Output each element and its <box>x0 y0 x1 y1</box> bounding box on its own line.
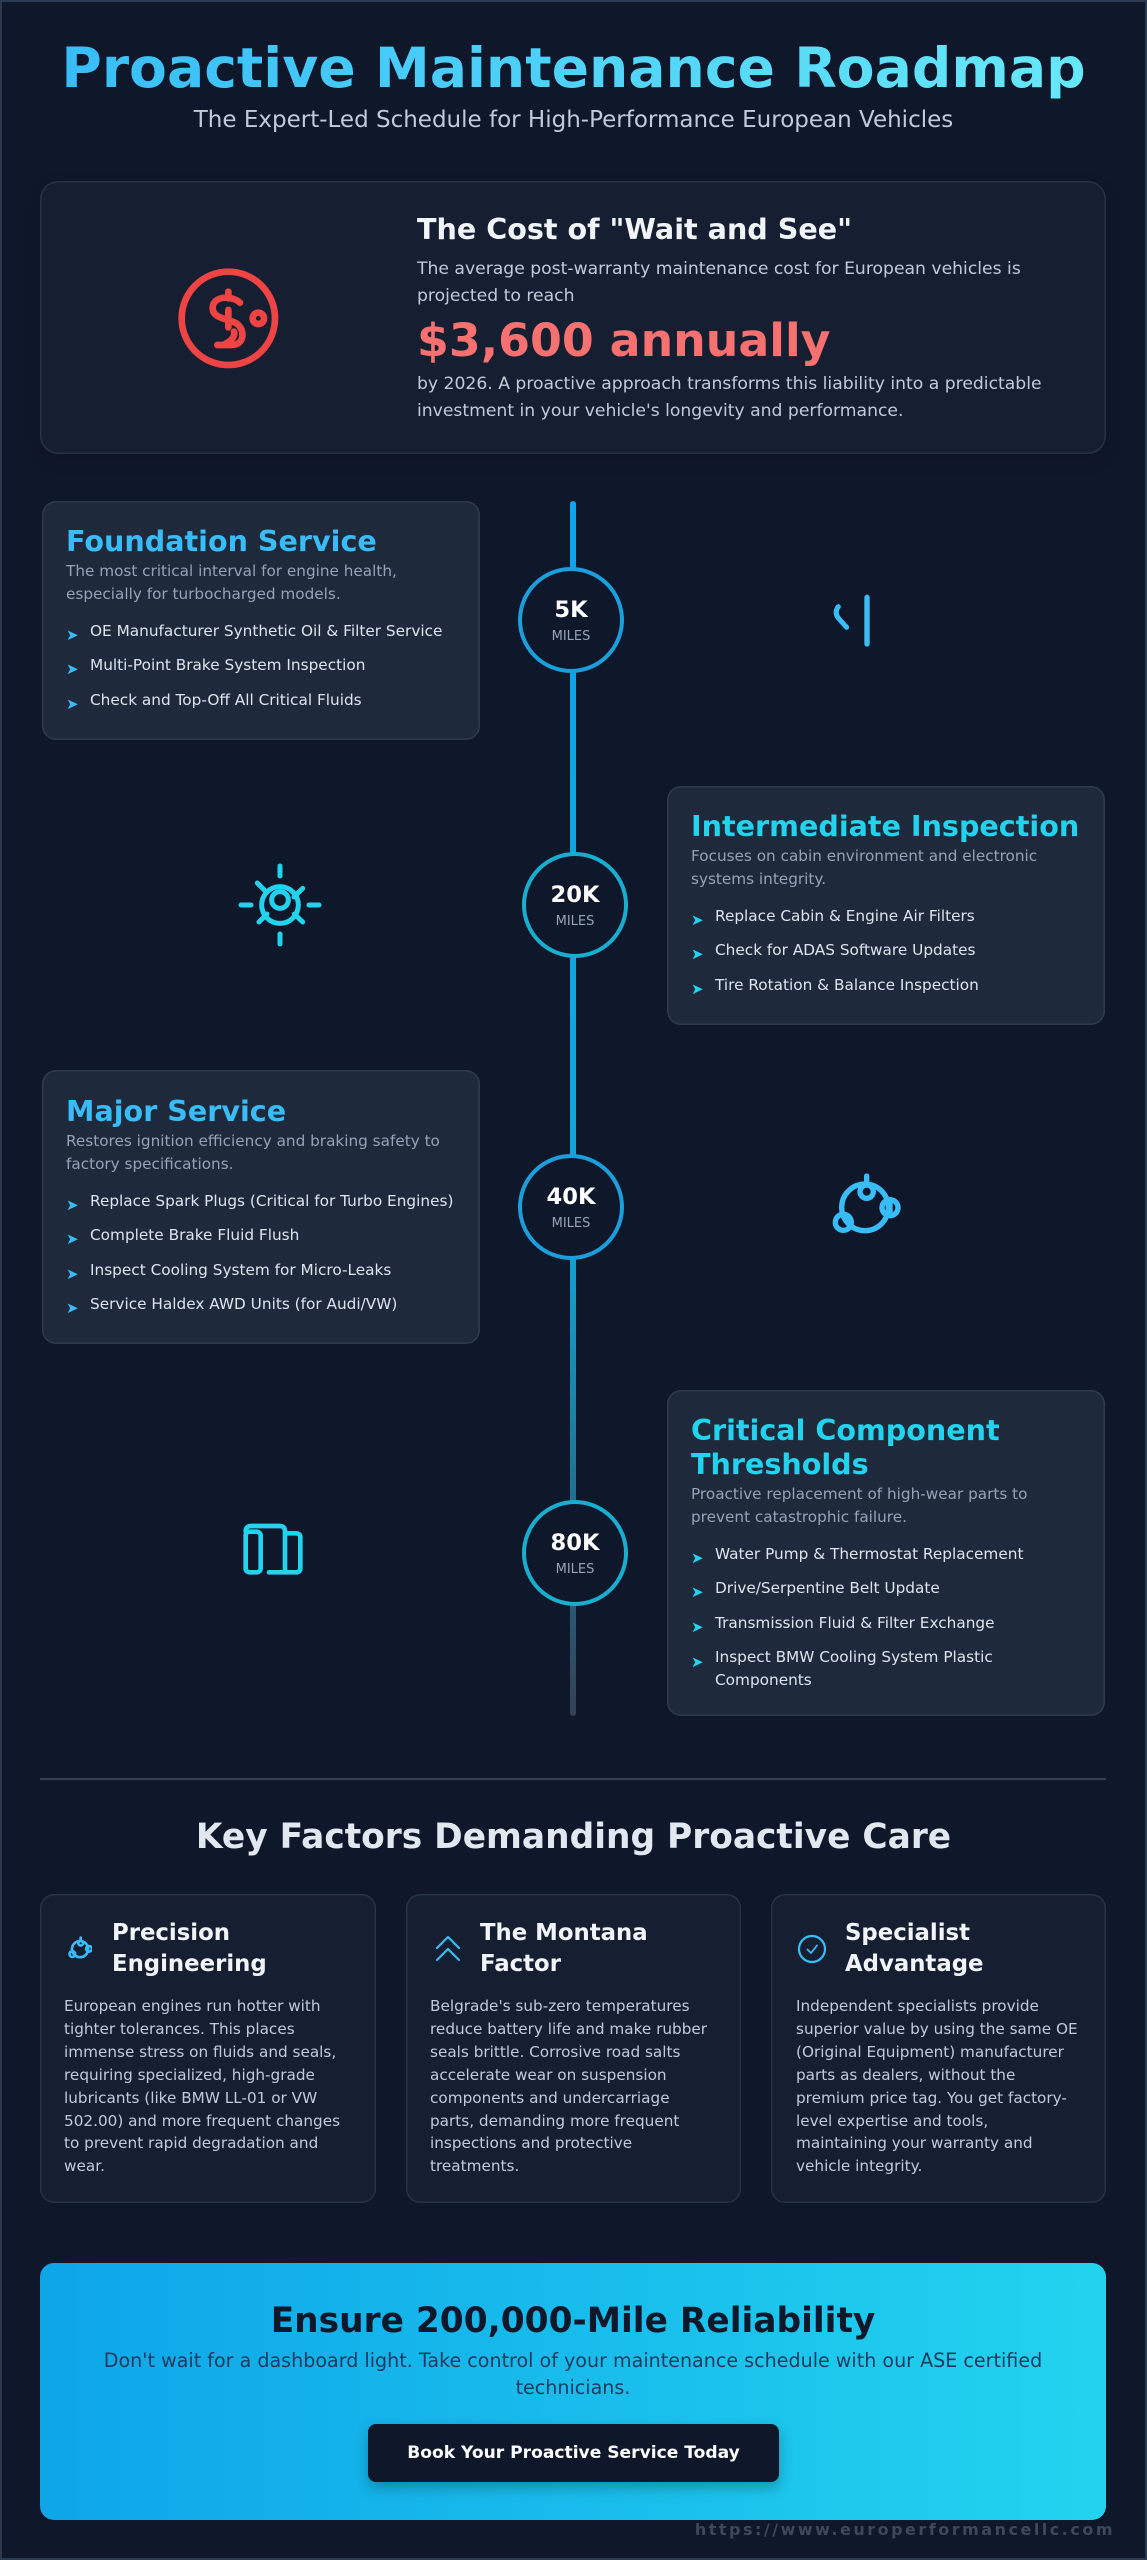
heading: key factors: Key Factors Demanding Proactive Care <box>196 1817 951 1857</box>
list item: Inspect Cooling System for Micro-Leaks <box>90 1261 391 1279</box>
body text: parts as dealers, without the <box>796 2066 1015 2084</box>
body text: superior value by using the same OE <box>796 2020 1078 2038</box>
text: outro <box>417 374 1042 421</box>
body text: immense stress on fluids and seals, <box>64 2043 336 2061</box>
divider <box>40 1778 1106 1780</box>
heading <box>112 1920 267 1977</box>
list item: ➤ <box>66 660 79 678</box>
list item: Complete Brake Fluid Flush <box>90 1226 299 1244</box>
milestone: 80K: 80K <box>551 1530 599 1556</box>
list item: Multi-Point Brake System Inspection <box>90 656 365 674</box>
panel: intermediate inspection <box>667 786 1105 1025</box>
list item: ➤ <box>691 980 704 998</box>
milestone: 80K <box>522 1500 628 1606</box>
body text: lubricants (like BMW LL-01 or VW <box>64 2089 317 2107</box>
heading <box>691 1413 1000 1481</box>
list item: Tire Rotation & Balance Inspection <box>715 976 979 994</box>
heading: Intermediate Inspection <box>691 809 1079 843</box>
list item: ➤ <box>66 1230 79 1248</box>
description <box>691 1484 1027 1526</box>
body text: inspections and protective <box>430 2134 632 2152</box>
body text: premium price tag. You get factory- <box>796 2089 1067 2107</box>
body text: reduce battery life and make rubber <box>430 2020 707 2038</box>
list item: Service Haldex AWD Units (for Audi/VW) <box>90 1295 397 1313</box>
body text: (Original Equipment) manufacturer <box>796 2043 1064 2061</box>
icon: parts blocks <box>243 1524 303 1575</box>
list item: ➤ <box>66 1264 79 1282</box>
milestone: 20K: MILES <box>556 914 594 929</box>
description: Restores ignition efficiency and braking safety to <box>66 1132 440 1150</box>
text: intro: The average post-warranty maintenance cost for European vehicles is <box>417 259 1021 279</box>
website url: https://www.europerformancellc.com <box>695 2520 1115 2539</box>
list item: ➤ <box>691 1652 704 1670</box>
panel: foundation service <box>42 501 480 740</box>
milestone: 40K: MILES <box>552 1216 590 1231</box>
heading <box>845 1920 984 1977</box>
body text: accelerate wear on suspension <box>430 2066 667 2084</box>
body text: requiring specialized, high-grade <box>64 2066 315 2084</box>
list item: Check for ADAS Software Updates <box>715 941 976 959</box>
milestone: 80K: MILES <box>556 1562 594 1577</box>
title: Proactive Maintenance Roadmap <box>61 37 1086 101</box>
list item: Inspect BMW Cooling System Plastic <box>715 1648 993 1666</box>
description: prevent catastrophic failure. <box>691 1508 907 1526</box>
heading: Critical Component <box>691 1413 1000 1447</box>
panel: cost of wait and see <box>40 181 1106 454</box>
body text: tighter tolerances. This places <box>64 2020 295 2038</box>
description: factory specifications. <box>66 1154 234 1172</box>
list item: ➤ <box>691 1582 704 1600</box>
body text: level expertise and tools, <box>796 2112 988 2130</box>
list item: Transmission Fluid & Filter Exchange <box>715 1614 995 1632</box>
heading: The Montana <box>480 1920 648 1946</box>
list item: ➤ <box>66 626 79 644</box>
list item: ➤ <box>691 944 704 962</box>
list item: Components <box>715 1671 812 1689</box>
body text: parts, demanding more frequent <box>430 2112 679 2130</box>
text: outro: by 2026. A proactive approach transforms this liability into a predictable <box>417 374 1042 394</box>
panel: precision engineering <box>40 1894 376 2203</box>
list item: ➤ <box>691 910 704 928</box>
icon: precision <box>68 1936 92 1958</box>
body text: maintaining your warranty and <box>796 2134 1033 2152</box>
description: Focuses on cabin environment and electronic <box>691 846 1037 864</box>
button <box>368 2424 779 2482</box>
list item: OE Manufacturer Synthetic Oil & Filter Service <box>90 622 442 640</box>
heading: Foundation Service <box>66 524 377 558</box>
list item: Replace Cabin & Engine Air Filters <box>715 907 975 925</box>
timeline line <box>570 501 576 1716</box>
button: Book Your Proactive Service Today <box>407 2443 740 2463</box>
icon: gear sun <box>238 864 322 946</box>
body text <box>64 1997 340 2175</box>
panel: major service <box>42 1070 480 1344</box>
body text <box>430 1997 707 2175</box>
heading: the cost of wait and see: The Cost of "Wait and See" <box>417 212 852 246</box>
panel: critical component thresholds <box>667 1390 1105 1716</box>
heading <box>480 1920 648 1977</box>
text: intro <box>416 259 1021 306</box>
list item: ➤ <box>66 1196 79 1214</box>
milestone: 40K: 40K <box>547 1184 595 1210</box>
icon: wrench fragment <box>834 594 870 647</box>
heading: Precision <box>112 1920 230 1946</box>
body text: 502.00) and more frequent changes <box>64 2112 340 2130</box>
icon: dollar coin <box>178 268 278 368</box>
body text: vehicle integrity. <box>796 2157 922 2175</box>
list item: Replace Spark Plugs (Critical for Turbo Engines) <box>90 1192 453 1210</box>
milestone: 40K <box>518 1154 624 1260</box>
body text: treatments. <box>430 2157 519 2175</box>
body text: Belgrade's sub-zero temperatures <box>430 1997 690 2015</box>
body text <box>796 1997 1078 2175</box>
body text: to prevent rapid degradation and <box>64 2134 318 2152</box>
heading: Factor <box>480 1951 561 1977</box>
icon: chevrons up <box>436 1936 460 1962</box>
subtitle: The Expert-Led Schedule for High-Performance European Vehicles <box>194 107 953 133</box>
description: especially for turbocharged models. <box>66 584 341 602</box>
icon: wheel with nodes <box>832 1173 901 1234</box>
text: outro: investment in your vehicle's longevity and performance. <box>417 401 903 421</box>
body text: wear. <box>64 2157 105 2175</box>
description <box>66 562 397 602</box>
heading: Engineering <box>112 1951 267 1977</box>
list item: Water Pump & Thermostat Replacement <box>715 1545 1023 1563</box>
stat: 3600 annually: $3,600 annually <box>417 313 831 367</box>
icon: check circle <box>798 1934 826 1964</box>
panel: the montana factor <box>406 1894 741 2203</box>
description: Proactive replacement of high-wear parts to <box>691 1484 1027 1502</box>
list item: ➤ <box>66 1298 79 1316</box>
list item: Drive/Serpentine Belt Update <box>715 1579 940 1597</box>
heading: Major Service <box>66 1094 286 1128</box>
list item: ➤ <box>691 1618 704 1636</box>
milestone: 5K <box>518 567 624 673</box>
heading: Specialist <box>845 1920 970 1946</box>
description: systems integrity. <box>691 870 826 888</box>
list item <box>691 1648 993 1689</box>
heading: Thresholds <box>691 1447 869 1481</box>
heading: Ensure 200,000-Mile Reliability <box>271 2301 875 2341</box>
text: Don't wait for a dashboard light. Take control of your maintenance schedule with our ASE certified <box>104 2349 1042 2372</box>
panel: call to action <box>40 2263 1106 2520</box>
body text: components and undercarriage <box>430 2089 670 2107</box>
milestone: 5K: MILES <box>552 629 590 644</box>
list item: ➤ <box>691 1548 704 1566</box>
milestone: 5K: 5K <box>554 597 588 623</box>
body text: Independent specialists provide <box>796 1997 1039 2015</box>
description: The most critical interval for engine health, <box>66 562 397 580</box>
panel: specialist advantage <box>771 1894 1106 2203</box>
description <box>66 1132 440 1172</box>
body text: European engines run hotter with <box>64 1997 321 2015</box>
text: technicians. <box>516 2376 630 2399</box>
text <box>104 2349 1042 2399</box>
list item: Check and Top-Off All Critical Fluids <box>90 691 362 709</box>
body text: seals brittle. Corrosive road salts <box>430 2043 680 2061</box>
description <box>691 846 1037 888</box>
list item: ➤ <box>66 694 79 712</box>
milestone: 20K <box>522 852 628 958</box>
milestone: 20K: 20K <box>551 882 599 908</box>
heading: Advantage <box>845 1951 984 1977</box>
text: intro: projected to reach <box>417 286 574 306</box>
